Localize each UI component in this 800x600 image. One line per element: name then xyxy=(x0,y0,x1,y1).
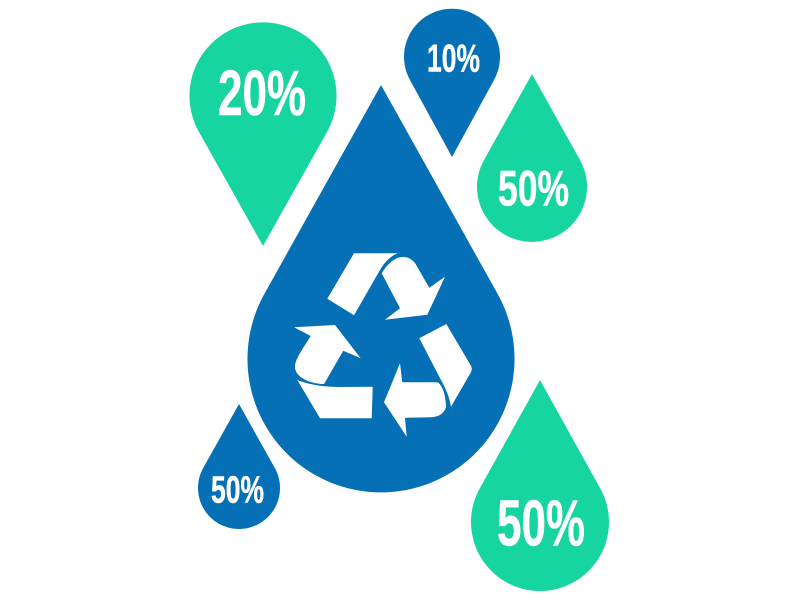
blue pin 10%: 10% xyxy=(427,38,480,80)
blue pin 10% xyxy=(404,9,500,157)
green drop 50% bottom right: 50% xyxy=(497,486,585,560)
large blue drop xyxy=(247,85,514,492)
green drop 50% right xyxy=(477,74,587,242)
green drop 50% bottom right xyxy=(471,380,609,591)
blue drop 50% left xyxy=(198,404,280,529)
green drop 50% right: 50% xyxy=(498,160,569,216)
green pin 20%: 20% xyxy=(218,57,306,129)
green pin 20% xyxy=(190,22,336,246)
central water drop with recycling symbol xyxy=(247,85,514,492)
blue drop 50% left: 50% xyxy=(211,470,264,512)
icon: recycling arrows xyxy=(294,253,472,437)
